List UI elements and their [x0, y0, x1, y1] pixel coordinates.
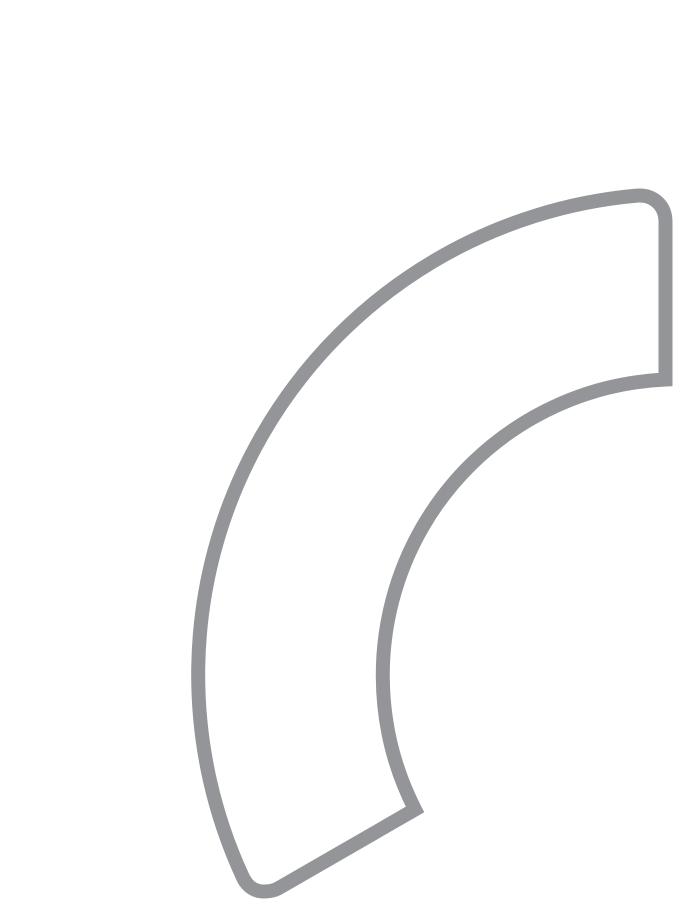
curved arc segment outline — [198, 196, 666, 891]
